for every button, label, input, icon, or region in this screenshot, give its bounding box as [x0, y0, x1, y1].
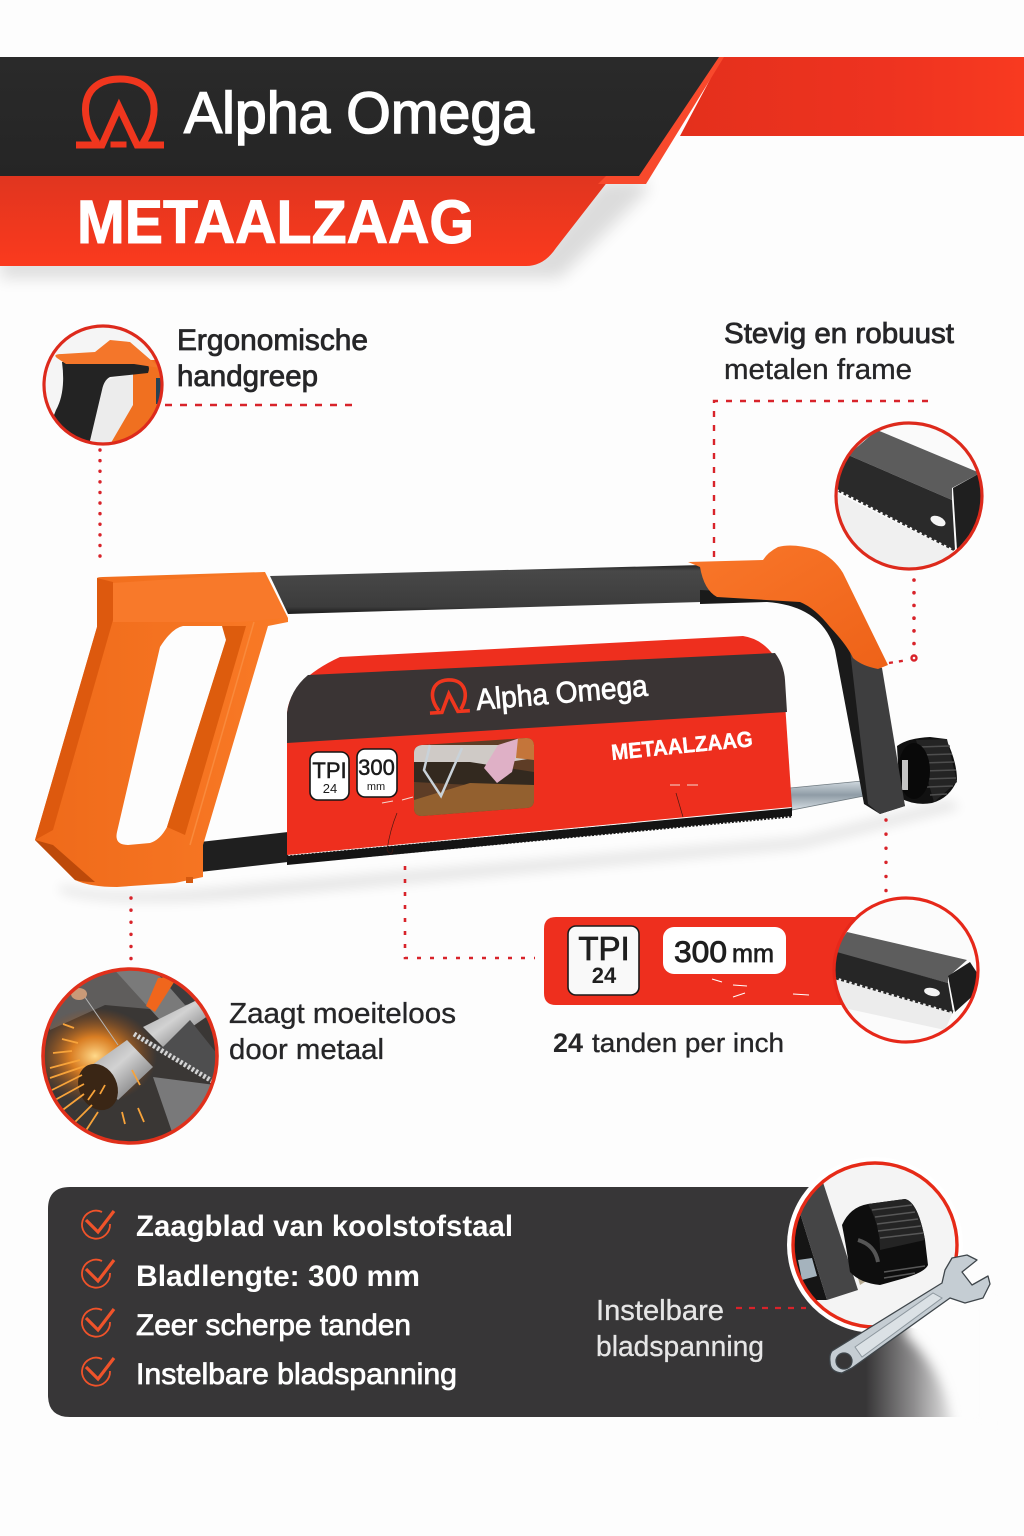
tension caption: bladspanning	[596, 1331, 764, 1363]
card length badge: mm	[367, 781, 385, 793]
shadow	[60, 800, 960, 901]
brand name: Alpha Omega	[184, 81, 535, 146]
callout: handgreep	[44, 324, 368, 558]
length pill: 300	[674, 936, 727, 969]
length pill: mm	[732, 940, 774, 968]
card red body	[287, 636, 792, 855]
hacksaw product	[35, 546, 960, 901]
callout text: Zaagt moeiteloos	[229, 998, 456, 1030]
connector lines	[100, 405, 355, 558]
callout text: door metaal	[229, 1034, 384, 1066]
logo icon	[76, 79, 164, 146]
TPI badge: TPI	[578, 930, 630, 967]
callout text: Stevig en robuust	[724, 318, 954, 350]
blade teeth	[287, 813, 792, 860]
handle	[35, 572, 288, 887]
feature: bladlengte: Bladlengte: 300 mm	[136, 1260, 420, 1293]
callout: bottom connector left	[129, 898, 133, 960]
connector lines	[714, 401, 928, 663]
feature: bladspanning: Instelbare bladspanning	[136, 1358, 457, 1391]
red strip top right	[680, 57, 1024, 136]
dark logo band	[0, 57, 719, 176]
card dark band	[287, 653, 787, 743]
length pill	[663, 927, 786, 974]
tension caption: Instelbare	[596, 1295, 724, 1327]
TPI badge: 24	[592, 963, 617, 988]
card TPI badge: TPI	[312, 758, 347, 783]
tension caption	[596, 1295, 764, 1363]
callout text: handgreep	[177, 360, 318, 393]
TPI spec bar	[544, 898, 985, 1058]
metal tension rod	[790, 780, 874, 810]
product title: METAALZAAG	[77, 188, 474, 256]
frame top bar	[270, 565, 770, 614]
features panel	[48, 1157, 990, 1425]
zoom circle: frame	[834, 421, 984, 571]
card brand: Alpha Omega	[475, 670, 649, 717]
frame curve	[700, 590, 905, 814]
card photo	[414, 738, 534, 820]
feature: tanden: Zeer scherpe tanden	[136, 1309, 411, 1342]
zoom circle: blade end	[830, 898, 985, 1042]
callout text: Ergonomische	[177, 324, 368, 357]
icon: wrench	[830, 1255, 990, 1373]
callout text	[229, 998, 456, 1066]
card scratches	[382, 785, 698, 854]
packaging card	[287, 636, 792, 865]
TPI badge	[568, 926, 639, 995]
callout: right connector	[884, 820, 888, 892]
frame end plate	[850, 650, 905, 814]
callout: frame	[714, 318, 990, 663]
bar scratches	[712, 979, 809, 997]
zoom circle: handle	[44, 326, 170, 450]
teeth caption: 24	[553, 1028, 583, 1058]
zoom circle: cutting photo	[33, 965, 222, 1143]
zoom circle: knob	[785, 1157, 963, 1333]
feature: koolstofstaal: Zaagblad van koolstofstaal	[136, 1210, 513, 1243]
callout text	[724, 318, 954, 386]
header banner	[0, 57, 1024, 278]
tension knob	[897, 737, 957, 804]
card logo	[428, 679, 470, 713]
card blade strip	[287, 808, 792, 865]
callout text: metalen frame	[724, 354, 912, 386]
red title band	[0, 176, 612, 266]
teeth caption: tanden per inch	[592, 1028, 784, 1058]
fade overlay	[905, 1300, 985, 1425]
callout text	[177, 324, 368, 393]
card TPI badge	[310, 752, 349, 800]
orange frame grip	[688, 546, 888, 669]
card length badge	[357, 749, 397, 797]
card length badge: 300	[358, 755, 395, 780]
callout: blade teeth connector	[405, 866, 535, 958]
tension connector	[736, 1307, 806, 1309]
lower blade holder bar	[200, 832, 288, 872]
accent edge	[598, 57, 724, 184]
callout: metal cutting	[33, 965, 456, 1143]
card TPI badge: 24	[323, 781, 337, 796]
card title: METAALZAAG	[610, 726, 754, 765]
